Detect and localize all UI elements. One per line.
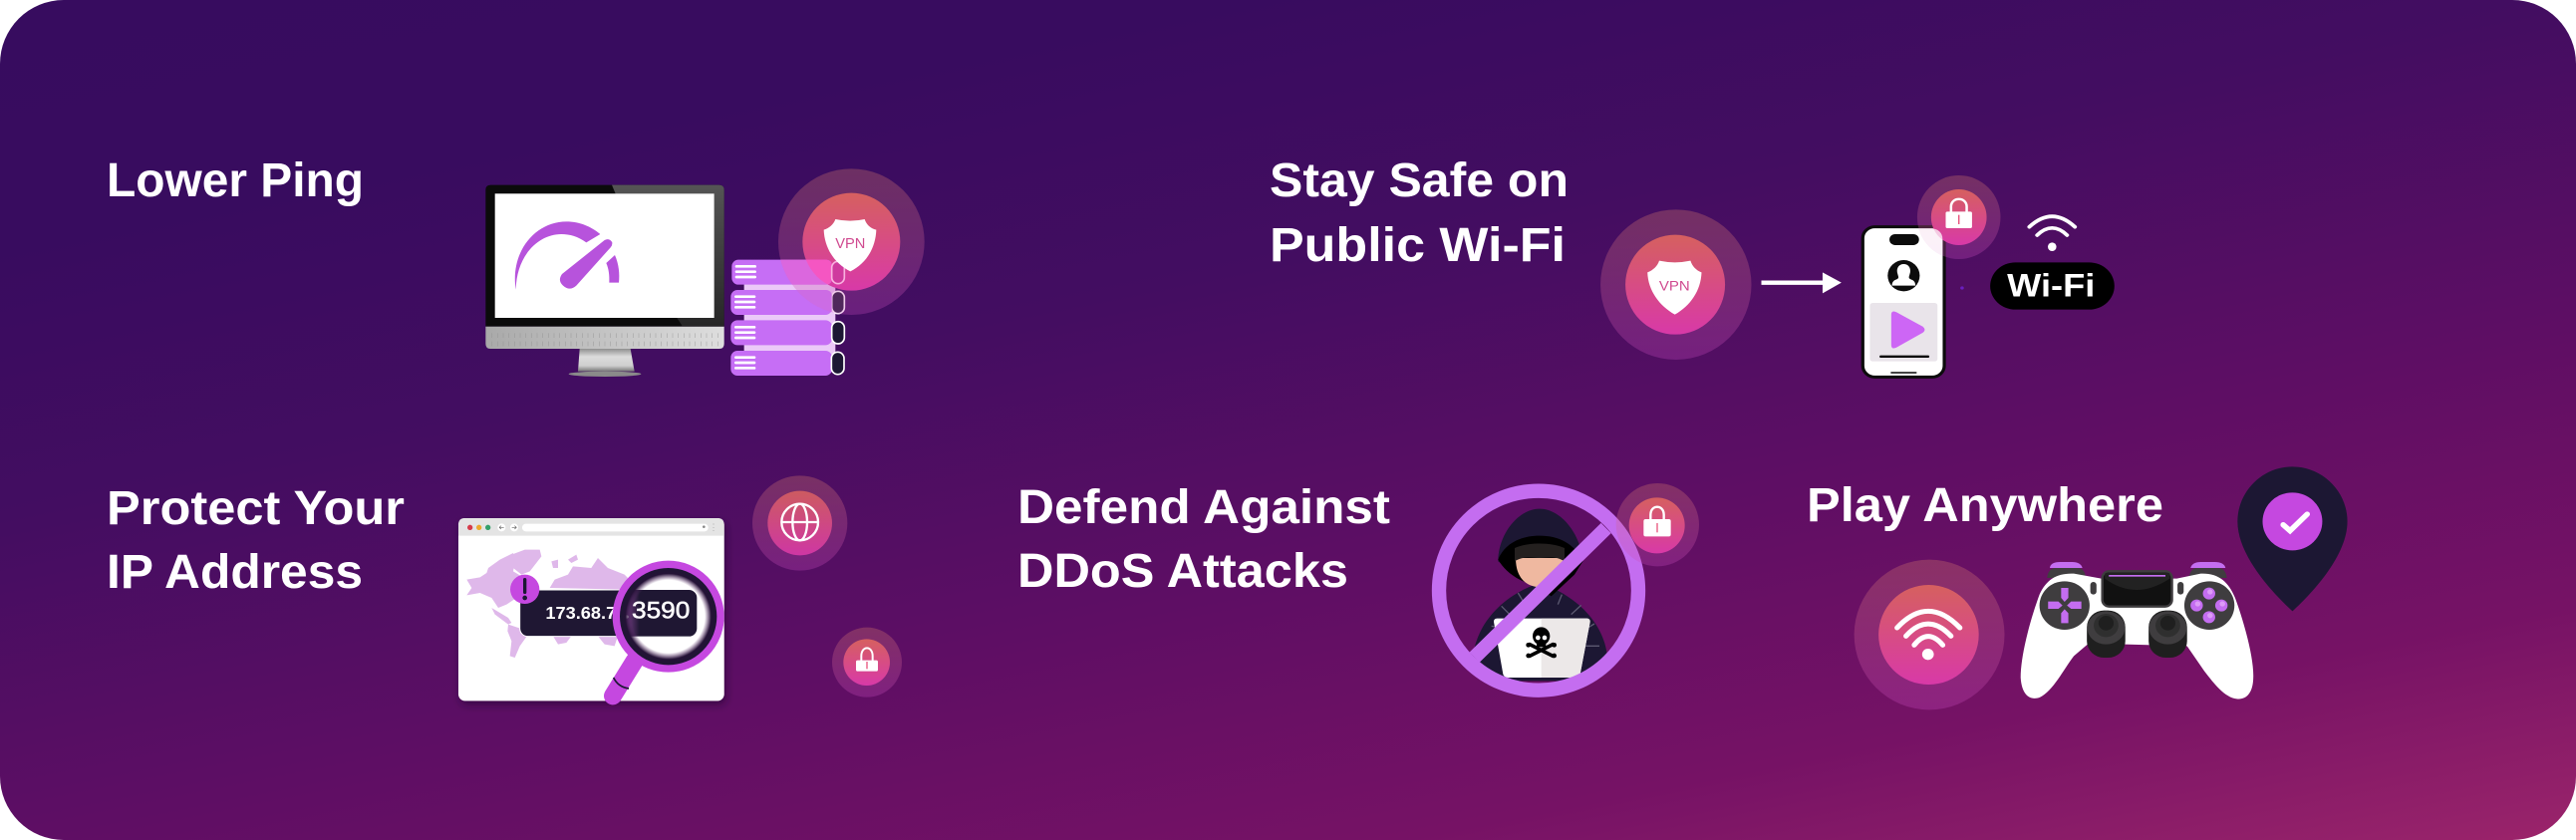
icon: monitor [485,185,724,377]
icon: hacker at laptop [1473,509,1607,681]
browser window [458,518,724,700]
heading: Stay Safe on Public Wi-Fi: Public Wi-Fi [1270,219,1566,272]
IP address box: 173.68.79 [545,603,626,623]
Wi-Fi label pill: Wi-Fi [2007,269,2095,304]
heading: Lower Ping: Lower Ping [107,154,364,207]
icon: prohibition sign [1439,491,1638,691]
arrow [1761,272,1842,293]
icon: location pin [2237,466,2348,611]
heading: Defend Against DDoS Attacks [1017,481,1390,598]
heading: Defend Against DDoS Attacks: Defend Against [1017,481,1390,534]
heading: Play Anywhere: Play Anywhere [1807,479,2163,532]
heading: Protect Your IP Address: IP Address [107,546,363,599]
illustration: controller, wifi badge and location pin [1855,466,2348,709]
icon: wifi signal [2029,216,2075,251]
icon: VPN shield badge [1600,209,1751,360]
IP address box [520,590,697,637]
icon: lock badge [1616,483,1699,566]
Wi-Fi label pill [1990,262,2115,310]
illustration: monitor with gauge, servers and VPN badge [485,168,925,377]
icon: globe badge [752,475,847,571]
heading: Stay Safe on Public Wi-Fi [1270,154,1569,272]
icon: VPN shield badge: VPN [835,236,865,252]
illustration: hacker behind prohibition sign [1439,483,1699,691]
illustration: VPN to phone on public Wi-Fi [1600,175,2115,377]
icon: wifi badge [1855,560,2005,709]
icon: magnifying glass: 3590 [632,598,690,625]
heading: Protect Your IP Address: Protect Your [107,482,405,535]
icon: phone [1862,227,1944,377]
illustration: browser with IP address under magnifier [458,475,902,700]
icon: server stack [730,260,844,376]
icon: VPN shield badge: VPN [1659,279,1690,294]
icon: lock badge [1917,175,2001,259]
icon: skull and crossbones [1526,627,1557,658]
heading: Defend Against DDoS Attacks: DDoS Attacks [1017,545,1348,598]
heading: Stay Safe on Public Wi-Fi: Stay Safe on [1270,154,1569,207]
icon: game controller [2021,562,2253,699]
icon: alert badge [510,575,539,604]
icon: VPN shield badge [772,168,925,315]
world map [466,550,628,658]
heading: Protect Your IP Address [107,482,405,599]
icon: lock badge [832,628,902,698]
icon: magnifying glass [605,564,720,696]
